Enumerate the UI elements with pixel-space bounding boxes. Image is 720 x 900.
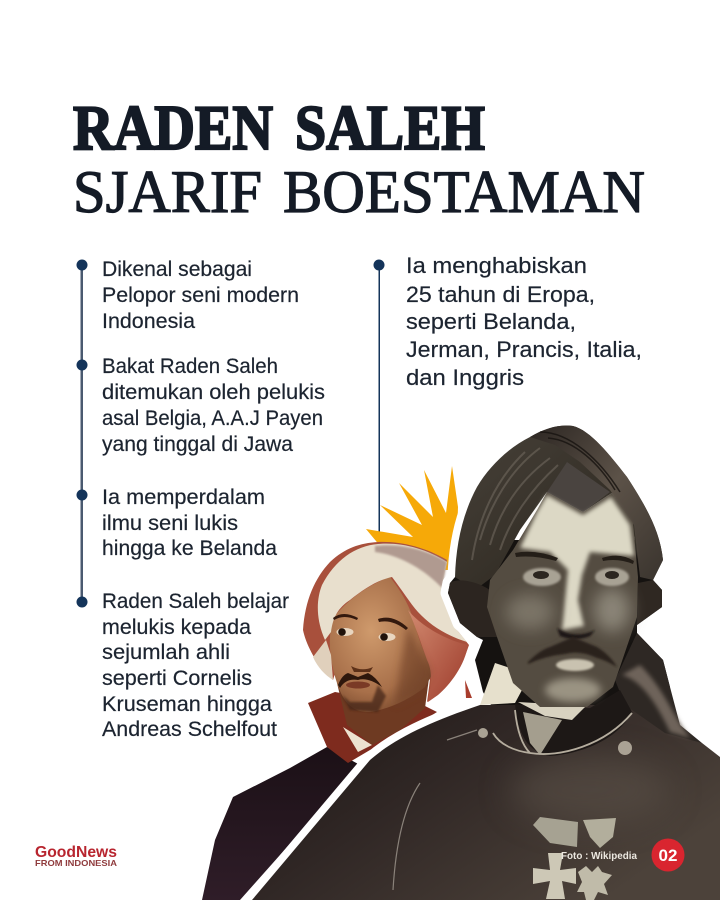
text block: bakat: asal Belgia, A.A.J Payen [102, 407, 323, 430]
nose shadow [351, 666, 373, 672]
right ear [637, 580, 662, 625]
logo: GoodNews from Indonesia: FROM INDONESIA [35, 858, 117, 868]
text block: pelopor [102, 258, 299, 333]
turban pattern band [375, 545, 447, 588]
text block: guru: sejumlah ahli [102, 641, 230, 664]
title: SJARIF [73, 159, 262, 225]
coat [202, 747, 360, 900]
text block: eropa: Jerman, Prancis, Italia, [406, 337, 642, 362]
turban folds [472, 448, 558, 560]
title: BOESTAMAN [283, 159, 645, 225]
title: RADEN [73, 92, 273, 163]
text block: belanda: hingga ke Belanda [102, 537, 277, 560]
title: SALEH [295, 92, 485, 163]
collar [308, 692, 437, 763]
text block: guru: melukis kepada [102, 616, 251, 639]
page number [652, 838, 684, 872]
portrait: elder Raden Saleh [252, 425, 720, 900]
timeline: left column [76, 260, 88, 608]
text block: eropa: 25 tahun di Eropa, [406, 282, 595, 307]
text block: eropa: seperti Belanda, [406, 309, 576, 334]
logo: GoodNews from Indonesia [35, 844, 117, 868]
text block: guru [102, 590, 289, 741]
logo: GoodNews from Indonesia: GoodNews [35, 844, 117, 861]
coat light [510, 755, 670, 825]
hair tail right [615, 633, 702, 743]
left cheek [506, 594, 554, 630]
turban back [303, 542, 469, 702]
text block: bakat: Bakat Raden Saleh [102, 355, 278, 378]
goatee [342, 685, 386, 712]
text block: bakat [102, 355, 325, 456]
sleeve seam [393, 783, 420, 890]
title [73, 92, 645, 225]
right cheek [594, 588, 630, 632]
shirt [343, 727, 372, 752]
medals [533, 817, 616, 900]
eye sockets [523, 568, 629, 586]
text block: guru: Andreas Schelfout [102, 718, 277, 741]
shirt front [518, 702, 586, 720]
turban [455, 425, 663, 590]
chin [545, 678, 601, 702]
turban band [530, 425, 663, 580]
page number: 02 [659, 846, 677, 865]
turban lower wrap [313, 640, 333, 680]
text block: eropa: Ia menghabiskan [406, 253, 587, 278]
nose shadow [557, 628, 595, 639]
moustache and mouth [338, 673, 382, 688]
text block: eropa [406, 253, 642, 390]
white shirt collar [480, 663, 522, 705]
text block: pelopor: Dikenal sebagai [102, 258, 252, 281]
text block: belanda [102, 486, 277, 560]
portrait: young Raden Saleh [202, 542, 472, 900]
face base [487, 492, 638, 707]
turban red sash [408, 610, 468, 702]
text block: guru: seperti Cornelis [102, 667, 252, 690]
text block: guru: Raden Saleh belajar [102, 590, 289, 613]
face shade [395, 625, 430, 706]
left ear [448, 580, 497, 637]
text block: bakat: ditemukan oleh pelukis [102, 381, 325, 404]
lips [556, 659, 594, 671]
turban band lines [540, 432, 620, 492]
turban cream wrap [318, 544, 467, 642]
white cut-out outline [252, 425, 720, 900]
buttons [478, 728, 632, 755]
dark head backing [448, 540, 670, 720]
shoulder piping [447, 730, 477, 740]
photo credit: Foto : Wikipedia [561, 850, 637, 862]
cravat [523, 712, 562, 755]
icon: yellow starburst [366, 466, 458, 570]
sash tail [465, 680, 472, 698]
hair tail light [622, 665, 690, 738]
brows [333, 614, 408, 630]
text block: pelopor: Pelopor seni modern [102, 284, 299, 307]
text block: belanda: ilmu seni lukis [102, 512, 238, 535]
text block: pelopor: Indonesia [102, 310, 195, 333]
coat [252, 705, 720, 900]
eyes [336, 628, 396, 641]
text block: guru: Kruseman hingga [102, 693, 272, 716]
high collar [515, 690, 632, 756]
brows [515, 552, 634, 564]
eyes [533, 571, 619, 579]
neck [337, 670, 430, 745]
text block: belanda: Ia memperdalam [102, 486, 265, 509]
turban centre patch [547, 462, 610, 512]
collar piping [493, 710, 632, 754]
timeline: right column [374, 260, 384, 545]
text block: bakat: yang tinggal di Jawa [102, 433, 293, 456]
face [330, 577, 433, 712]
forehead light [520, 495, 634, 630]
text block: eropa: dan Inggris [406, 365, 524, 390]
moustache [528, 637, 617, 667]
lips [346, 682, 370, 688]
